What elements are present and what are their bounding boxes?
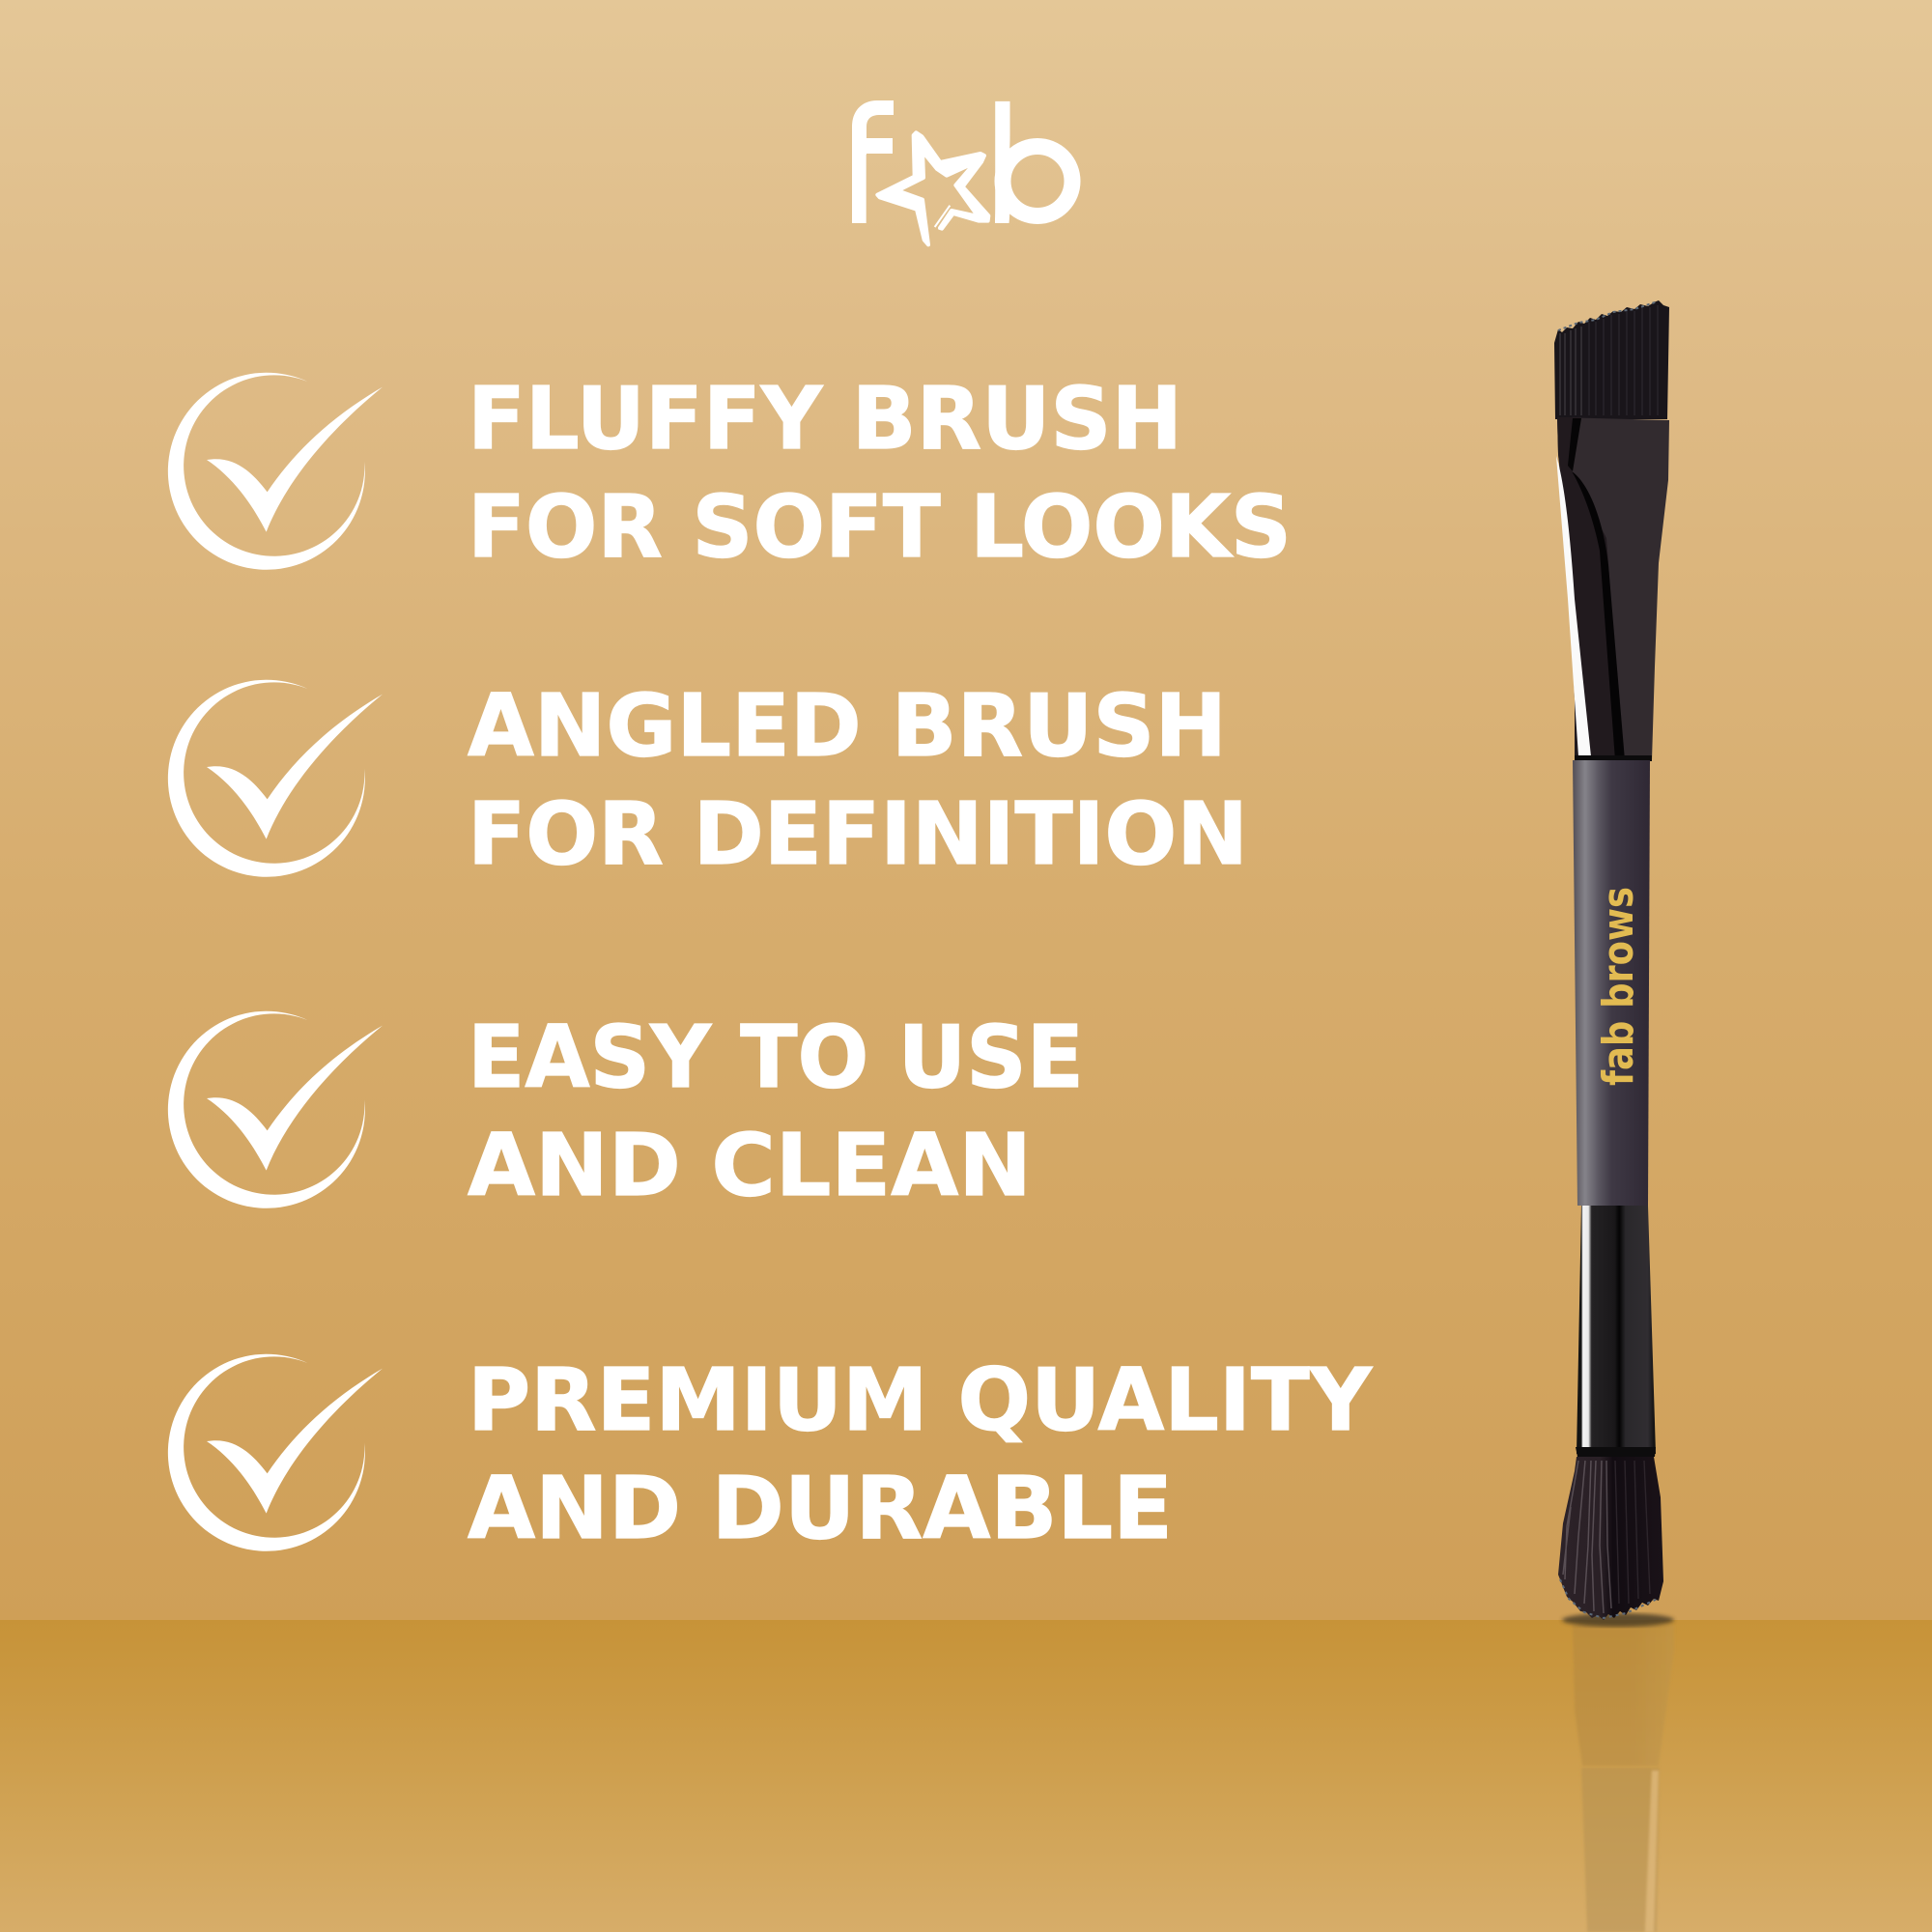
- feature 4: premium quality: [168, 1350, 1374, 1558]
- feature 3: easy to use: [168, 1007, 1084, 1215]
- ferrule rim: [1576, 1447, 1656, 1457]
- heading line 1: ANGLED BRUSH: [468, 675, 1227, 776]
- logo letter f: [852, 100, 894, 223]
- heading line 1: FLUFFY BRUSH: [468, 368, 1182, 469]
- icon: check mark in circle: [168, 680, 383, 877]
- logo letter b: b: [983, 71, 1077, 259]
- heading line 1: PREMIUM QUALITY: [468, 1350, 1374, 1450]
- reflective floor: [0, 1620, 1932, 1932]
- icon: check mark in circle: [168, 1011, 383, 1208]
- upper ferrule: [1556, 417, 1669, 761]
- product: double-ended brow brush: [1554, 300, 1669, 1620]
- heading line 2: FOR DEFINITION: [468, 783, 1248, 884]
- feature 1: fluffy brush: [168, 368, 1292, 577]
- shadow under brush: [1562, 1613, 1674, 1627]
- logo letter f: f: [837, 71, 884, 259]
- lower ferrule: [1577, 1206, 1656, 1454]
- textured handle: [1573, 760, 1650, 1206]
- icon: check mark in circle: [168, 373, 383, 570]
- logo star: [877, 132, 988, 244]
- heading line 2: AND CLEAN: [468, 1115, 1032, 1215]
- feature 2: angled brush: [168, 675, 1248, 884]
- heading line 2: AND DURABLE: [468, 1458, 1173, 1558]
- logo: fab: [852, 100, 1080, 247]
- angled bristles: [1554, 300, 1669, 419]
- heading line 2: FOR SOFT LOOKS: [468, 476, 1292, 577]
- round bristles: [1558, 1457, 1663, 1620]
- logo letter b: [995, 100, 1080, 224]
- icon: check mark in circle: [168, 1354, 383, 1551]
- handle label: fab brows: fab brows: [1594, 887, 1643, 1086]
- heading line 1: EASY TO USE: [468, 1007, 1084, 1107]
- brush reflection on floor: [1573, 1625, 1674, 1932]
